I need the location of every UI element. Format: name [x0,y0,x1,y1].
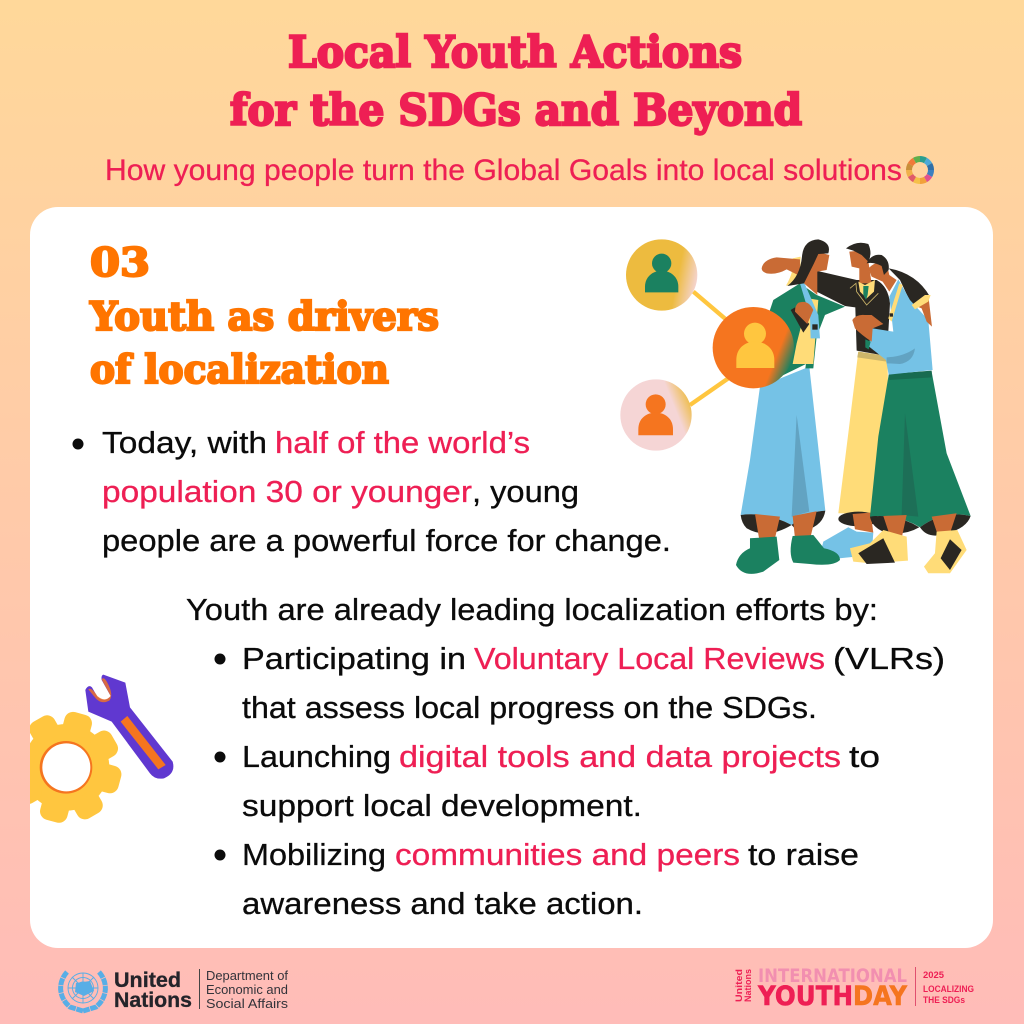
right figure: skirt, legs and shoes [850,371,971,573]
Youth Day wordmark [757,981,907,1012]
middle man: head and tie [846,243,878,305]
intro bullet text: Today, with [102,425,267,460]
title: Local Youth Actions [288,28,742,78]
subtitle: How young people turn the Global Goals into local solutions [105,154,902,187]
theme text: THE SDGs [923,995,965,1006]
middle man: trousers and shoe [822,352,889,558]
intro bullet text: population 30 or younger [102,474,472,509]
theme text: LOCALIZING [923,984,974,995]
leading-efforts intro line: Youth are already leading localization efforts by: [186,592,878,627]
bullet: digital tools [214,739,880,823]
theme text [923,970,974,1006]
icon: UN emblem [61,972,105,1011]
bullet: communities and peers: communities and peers [395,837,740,872]
intro bullet text: half of the world’s [275,425,530,460]
section heading [89,240,439,393]
department name: Economic and [206,983,288,997]
left woman: head and hair [787,239,829,295]
bullet: digital tools: digital tools and data projects [399,739,841,774]
icon: SDG colour wheel [909,159,931,181]
bullet: communities and peers: to raise [748,837,859,872]
United Nations wordmark [114,969,192,1012]
rotated United Nations label: United [734,969,744,1002]
bullet list [214,641,945,921]
icon: gear and wrench [30,674,174,823]
bullet: Voluntary Local Reviews: Participating in [242,641,466,676]
bullet: digital tools: support local development. [242,788,642,823]
right figure: black sleeve behind [889,268,930,308]
section heading: of localization [90,347,389,393]
logo: International Youth Day 2025 [734,965,974,1012]
section heading: Youth as drivers [89,294,439,340]
department name [206,969,289,1011]
Youth Day wordmark: DAY [853,981,907,1012]
United Nations wordmark: Nations [114,989,192,1012]
title [230,28,802,136]
rotated United Nations label: Nations [743,969,753,1002]
right figure: head [867,255,897,292]
department name: Department of [206,969,289,983]
bullet: Voluntary Local Reviews: that assess local progress on the SDGs. [242,690,817,725]
department name: Social Affairs [206,997,288,1011]
bullet: Voluntary Local Reviews [214,641,945,725]
bullet: communities and peers: Mobilizing [242,837,386,872]
intro bullet text [72,425,671,558]
gear [30,712,122,823]
logo: United Nations DESA [61,969,289,1012]
middle man: black jacket and arm [813,270,890,356]
left woman: green jacket, shirt, lanyard and fist [767,282,845,380]
wrench [85,675,173,779]
title: for the SDGs and Beyond [230,86,802,136]
icon: orange person node (in front of figures) [713,307,794,388]
theme text: 2025 [923,970,945,981]
bullet: communities and peers [214,837,859,921]
bullet: digital tools: Launching [242,739,391,774]
illustration: three young people embracing [736,239,971,574]
bullet: Voluntary Local Reviews: Voluntary Local Reviews [474,641,825,676]
bullet: Voluntary Local Reviews: (VLRs) [833,641,945,676]
intro bullet text: , young [472,474,579,509]
rotated United Nations label [734,969,753,1002]
United Nations wordmark: United [114,969,181,992]
Youth Day wordmark: YOUTH [757,981,853,1012]
bullet: communities and peers: awareness and take action. [242,886,643,921]
icon: connected people network [620,239,728,451]
back arm with hand [762,257,801,286]
intro bullet text: people are a powerful force for change. [102,523,671,558]
bullet: digital tools: to [849,739,880,774]
right figure: blue shirt, arm and fists [852,279,933,375]
left woman: blue skirt, legs and shoes [736,367,840,574]
section heading: 03 [90,240,150,286]
International wordmark: INTERNATIONAL [758,965,907,987]
panel: white content card [30,207,993,948]
